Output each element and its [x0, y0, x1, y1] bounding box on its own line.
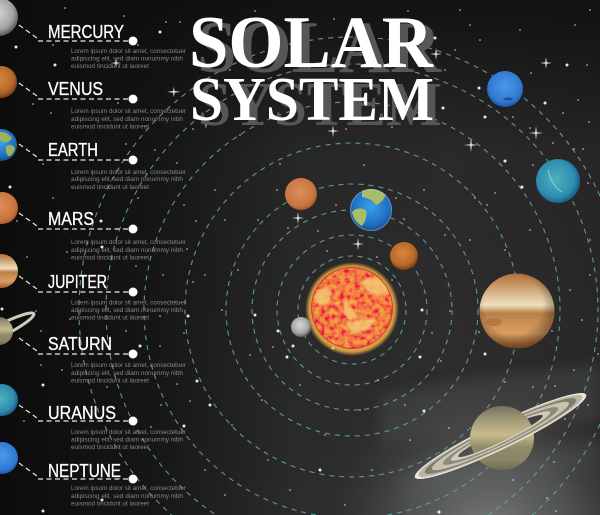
title shadow: SOLAR: [197, 7, 442, 89]
legend: venus: euismod tincidunt ut laoreet: [71, 124, 149, 130]
icon: mercury small: [0, 0, 18, 36]
legend: earth: EARTH: [48, 140, 98, 160]
saturn rings front: [415, 394, 586, 479]
legend: earth: Lorem ipsum dolor sit amet, consectetuer: [71, 169, 187, 176]
legend: mercury: Lorem ipsum dolor sit amet, consectetuer: [71, 48, 187, 55]
legend: neptune: NEPTUNE: [48, 461, 121, 481]
legend: mercury: adipiscing elit, sed diam nonummy nibh: [71, 56, 183, 62]
legend: saturn: euismod tincidunt ut laoreet: [71, 378, 149, 384]
legend: saturn: SATURN: [48, 334, 112, 354]
legend: jupiter: adipiscing elit, sed diam nonummy nibh: [71, 307, 183, 314]
title: solar system: [189, 2, 442, 139]
legend: jupiter: [0, 254, 187, 322]
legend: saturn: adipiscing elit, sed diam nonummy nibh: [71, 370, 183, 377]
icon: earth small: [0, 129, 17, 161]
legend: jupiter: Lorem ipsum dolor sit amet, consectetuer: [71, 300, 187, 306]
planet: saturn: [414, 393, 586, 479]
planet: neptune: [487, 71, 523, 107]
planet: earth: [350, 188, 392, 231]
legend: uranus: Lorem ipsum dolor sit amet, consectetuer: [71, 429, 187, 436]
legend: earth: [0, 129, 187, 191]
legend: saturn: Lorem ipsum dolor sit amet, consectetuer: [71, 362, 187, 369]
legend: saturn: [0, 308, 187, 384]
icon: venus small: [0, 66, 17, 98]
legend: mercury: [0, 0, 187, 70]
planet: jupiter: [480, 274, 554, 348]
legend: mars: Lorem ipsum dolor sit amet, consectetuer: [71, 239, 187, 246]
icon: neptune small: [0, 442, 18, 474]
legend: mars: euismod tincidunt ut laoreet: [71, 254, 149, 262]
legend: neptune: euismod tincidunt ut laoreet: [71, 500, 149, 508]
legend: neptune: adipiscing elit, sed diam nonummy nibh: [71, 493, 183, 500]
icon: uranus small: [0, 384, 18, 416]
legend: neptune: [0, 442, 187, 508]
icon: saturn small: [0, 308, 37, 354]
icon: jupiter small: [0, 254, 18, 288]
legend: venus: VENUS: [48, 79, 103, 99]
legend: mars: adipiscing elit, sed diam nonummy nibh: [71, 247, 183, 254]
legend: venus: adipiscing elit, sed diam nonummy nibh: [71, 116, 183, 123]
legend: jupiter: JUPITER: [48, 272, 107, 292]
legend: earth: euismod tincidunt ut laoreet: [71, 184, 149, 191]
title text: [189, 2, 434, 134]
legend: mercury: MERCURY: [48, 22, 124, 42]
legend: mercury: euismod tincidunt ut laoreet: [71, 63, 149, 70]
planet: mars: [285, 178, 317, 210]
saturn rings back: [409, 383, 592, 489]
title shadow: SYSTEM: [198, 71, 442, 139]
legend: uranus: euismod tincidunt ut laoreet: [71, 444, 149, 451]
legend: neptune: Lorem ipsum dolor sit amet, consectetuer: [71, 485, 187, 492]
sun: [305, 262, 399, 356]
sparkle stars: [111, 48, 552, 250]
legend: mars: MARS: [48, 209, 94, 229]
legend: earth: adipiscing elit, sed diam nonummy nibh: [71, 176, 183, 183]
title shadow: [197, 7, 442, 139]
legend: uranus: [0, 384, 187, 451]
legend: mars: [0, 192, 187, 262]
title text: SYSTEM: [190, 66, 434, 134]
legend: uranus: URANUS: [48, 403, 116, 423]
legend: jupiter: euismod tincidunt ut laoreet: [71, 314, 149, 322]
legend: uranus: adipiscing elit, sed diam nonummy nibh: [71, 436, 183, 444]
planet: venus: [390, 242, 418, 270]
planet: mercury: [291, 317, 311, 337]
title text: SOLAR: [189, 2, 434, 84]
legend: venus: Lorem ipsum dolor sit amet, consectetuer: [71, 108, 187, 115]
icon: mars small: [0, 192, 18, 224]
planet: uranus: [536, 159, 580, 203]
saturn globe: [470, 406, 534, 470]
legend: venus: [0, 66, 187, 130]
